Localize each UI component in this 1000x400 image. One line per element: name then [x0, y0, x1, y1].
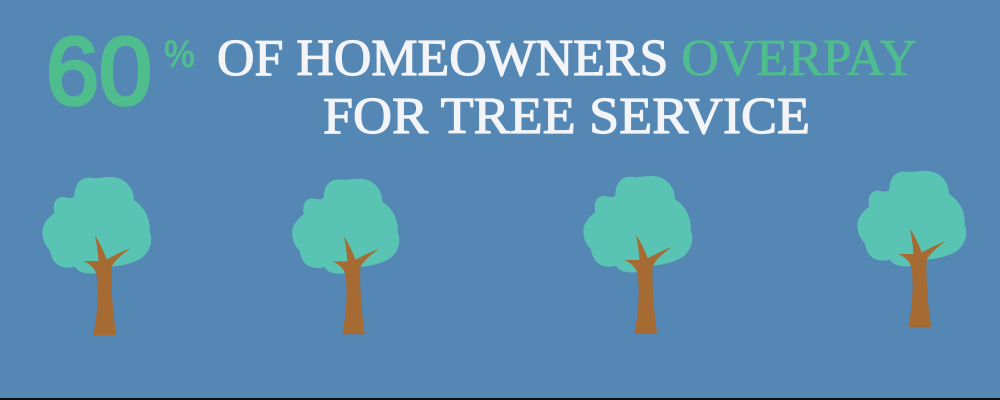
icon: tree 3 [584, 177, 692, 334]
icon: tree 4 [858, 171, 966, 327]
icon: tree 1 [43, 178, 151, 335]
big stat: 60 percent: 60 [46, 18, 152, 125]
icon: tree 2 [293, 179, 399, 334]
title [217, 30, 917, 145]
title: FOR TREE SERVICE [323, 88, 810, 145]
title: OF HOMEOWNERS OVERPAY [217, 30, 917, 87]
big stat: 60 percent: % [164, 33, 195, 76]
